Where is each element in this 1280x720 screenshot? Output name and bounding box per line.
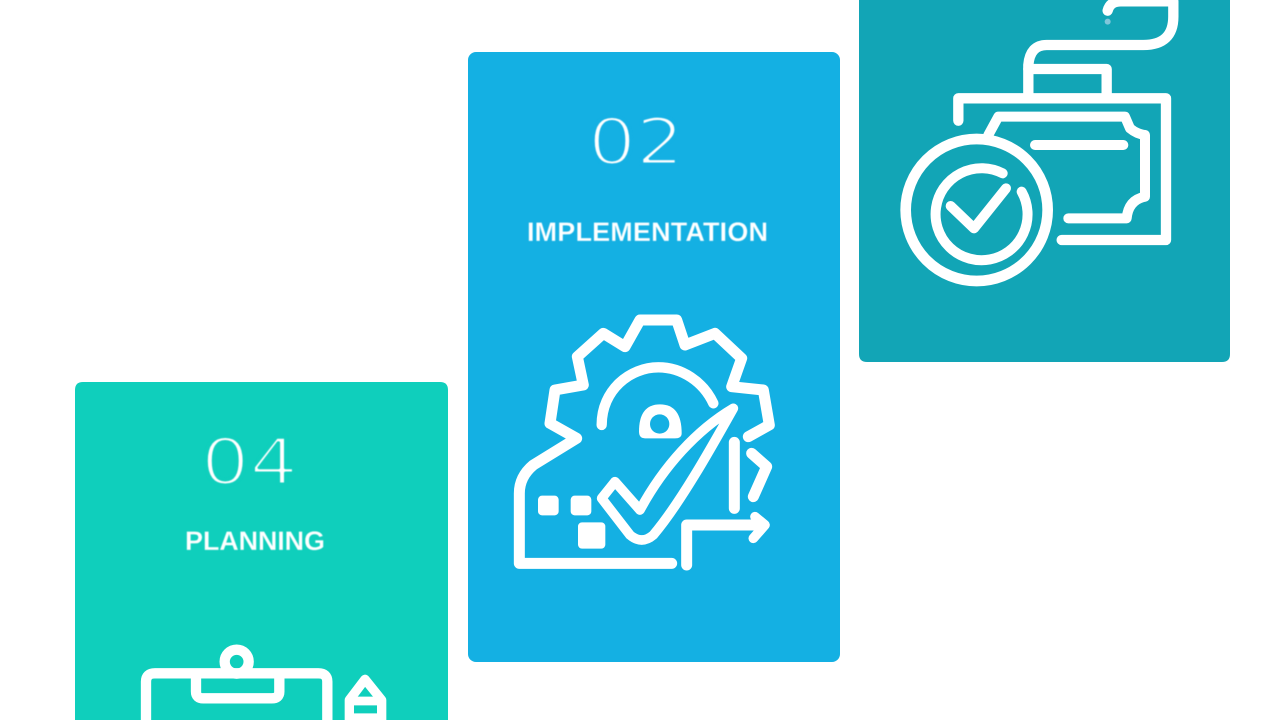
number 04: 04 — [201, 426, 298, 500]
card background: blue — [468, 52, 840, 662]
card background: teal — [859, 0, 1230, 362]
card background: green — [75, 382, 448, 720]
icon: gear with check mark — [519, 320, 769, 565]
heading: implementation: IMPLEMENTATION — [527, 217, 768, 247]
panel: top-right teal card — [859, 0, 1230, 362]
icon: money with check badge — [906, 1, 1173, 281]
panel: planning card — [75, 382, 448, 720]
number 02: 02 — [588, 106, 684, 180]
dome — [639, 404, 682, 438]
panel: implementation card — [468, 52, 840, 662]
heading: planning: PLANNING — [185, 526, 325, 556]
icon: clipboard and pencil — [146, 650, 382, 720]
